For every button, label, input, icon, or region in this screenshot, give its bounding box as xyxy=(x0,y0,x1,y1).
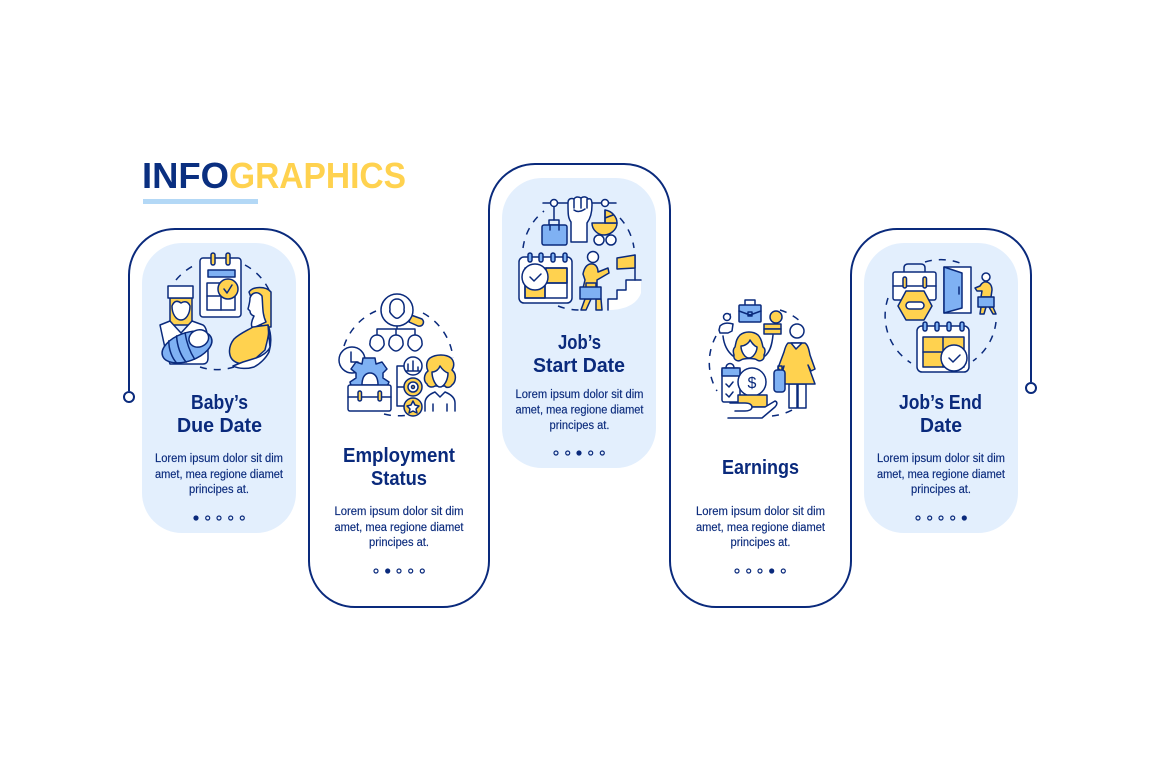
icon: earnings: $ xyxy=(748,375,757,392)
heading xyxy=(343,445,455,490)
body text: principes at. xyxy=(550,420,610,432)
title: GRAPHICS xyxy=(229,155,406,196)
body text: amet, mea regione diamet xyxy=(334,522,464,534)
body text: Lorem ipsum dolor sit dim xyxy=(334,506,464,518)
body text xyxy=(516,389,644,432)
body text: principes at. xyxy=(730,537,790,549)
pagination dots xyxy=(735,569,785,573)
heading: Job’s xyxy=(558,332,601,354)
icon: baby due date xyxy=(158,253,271,370)
heading: Status xyxy=(371,468,427,490)
panel: Earnings xyxy=(696,300,826,573)
heading: Employment xyxy=(343,445,455,467)
heading: Due Date xyxy=(177,415,262,437)
heading: Baby’s xyxy=(191,392,248,414)
body text xyxy=(696,506,826,549)
heading xyxy=(533,332,625,377)
heading xyxy=(177,392,262,437)
body text: principes at. xyxy=(189,484,249,496)
icon: job start xyxy=(519,197,641,310)
body text: Lorem ipsum dolor sit dim xyxy=(877,453,1005,465)
heading xyxy=(899,392,982,437)
title xyxy=(142,155,406,204)
body text: amet, mea regione diamet xyxy=(155,469,284,481)
icon: earnings xyxy=(709,300,815,418)
body text xyxy=(877,453,1006,496)
body text: amet, mea regione diamet xyxy=(516,404,644,416)
body text: Lorem ipsum dolor sit dim xyxy=(516,389,644,401)
body text: amet, mea regione diamet xyxy=(877,469,1006,481)
connecting outline xyxy=(124,164,1036,607)
heading: Date xyxy=(920,415,962,437)
heading: Job’s End xyxy=(899,392,982,414)
body text xyxy=(155,453,284,496)
pagination dots xyxy=(374,569,424,573)
body text: amet, mea regione diamet xyxy=(696,522,826,534)
panel: Baby's Due Date xyxy=(142,243,296,533)
pagination dots xyxy=(916,516,966,520)
body text: principes at. xyxy=(369,537,429,549)
pagination dots xyxy=(554,451,604,455)
panel: Job's End Date xyxy=(864,243,1018,533)
heading: Start Date xyxy=(533,355,625,377)
body text: Lorem ipsum dolor sit dim xyxy=(696,506,825,518)
heading: Earnings xyxy=(722,457,799,479)
body text xyxy=(334,506,464,549)
icon: job end xyxy=(885,260,996,372)
title: INFO xyxy=(142,155,229,196)
panel: Employment Status xyxy=(334,294,464,573)
pagination dots xyxy=(194,516,244,520)
panel: Job's Start Date xyxy=(502,178,656,468)
icon: employment xyxy=(339,294,455,416)
body text: principes at. xyxy=(911,484,971,496)
body text: Lorem ipsum dolor sit dim xyxy=(155,453,283,465)
